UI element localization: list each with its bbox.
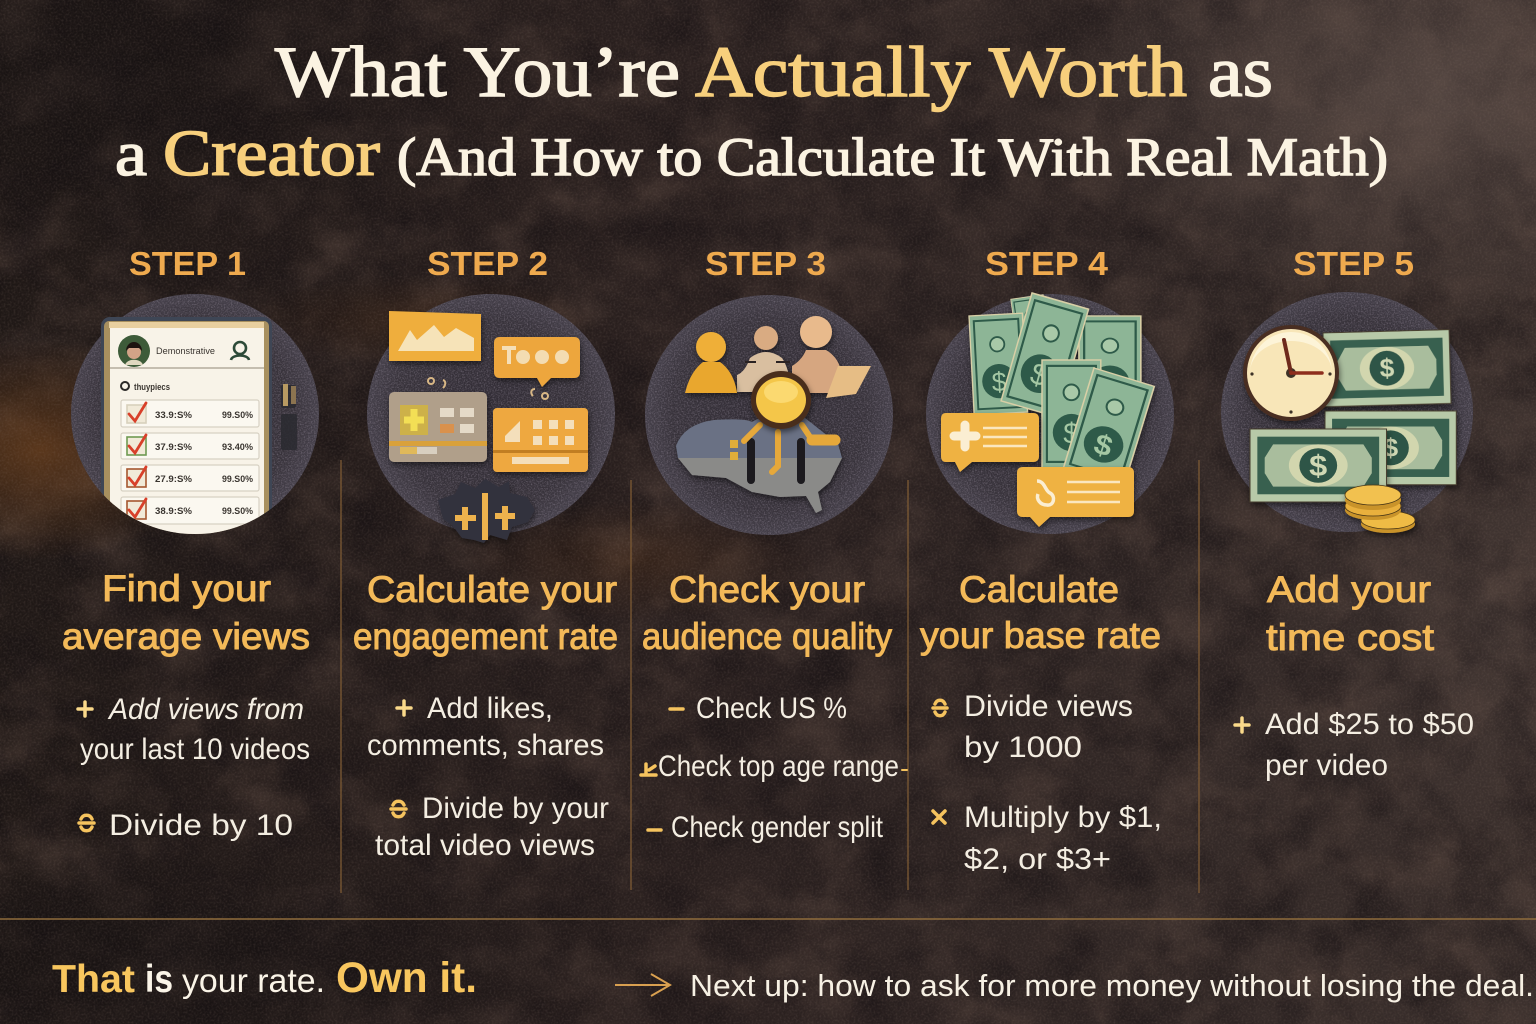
text: divide views (933, 690, 1133, 764)
title: as (1208, 32, 1273, 112)
icon: phone with checklist: 33.9:S% (155, 410, 192, 420)
heading: find your average views: Find your (102, 568, 271, 609)
text: multiply (933, 801, 1162, 876)
title (115, 32, 1388, 190)
footer: next up: Next up: how to ask for more money without losing the deal. (690, 968, 1534, 1003)
stats card (389, 392, 487, 462)
back bills: $ (991, 367, 1007, 397)
heading: add time cost: time cost (1266, 617, 1435, 658)
icon: phone with checklist: 27.9:S% (155, 474, 192, 484)
map (676, 413, 842, 513)
person left (685, 332, 737, 393)
step 4 label: STEP 4 (985, 245, 1109, 282)
heading: find your average views (62, 568, 310, 657)
heading: calculate base rate: your base rate (920, 615, 1161, 656)
bill top: $ (1379, 353, 1395, 383)
icon: phone with checklist: 99.S0% (222, 506, 253, 516)
text: add time cost per video: per video (1265, 749, 1388, 782)
back bills: $ (1090, 428, 1116, 463)
heading: add time cost (1266, 569, 1435, 658)
icon: phone with checklist: 93.40% (222, 442, 253, 452)
icon: phone with checklist: 99.S0% (222, 410, 253, 420)
text: check us: Check US % (696, 692, 847, 725)
icon: phone with checklist: 38.9:S% (155, 506, 192, 516)
title: Creator (163, 117, 380, 190)
text: add views (78, 693, 310, 766)
step 2 label: STEP 2 (427, 245, 548, 282)
title: What You’re (275, 32, 680, 112)
panel: step 1 (62, 245, 319, 842)
text: add views: Add views from (107, 693, 304, 726)
step 1 label: STEP 1 (129, 245, 246, 282)
text: divide by views: Divide by your (422, 792, 609, 825)
comment bubble (494, 337, 580, 387)
heading: add time cost: Add your (1267, 569, 1431, 610)
bubble left (941, 413, 1039, 472)
magnifier rays (744, 425, 835, 472)
coins (1345, 485, 1415, 533)
back bills: $ (1063, 417, 1080, 450)
footer: own it: your rate. (182, 962, 325, 999)
footer: own it: is (145, 958, 173, 1001)
person middle (737, 326, 791, 392)
panel: step 3 (641, 245, 907, 844)
bill top (1323, 330, 1451, 407)
text: add likes: comments, shares (367, 729, 604, 762)
icon: clock, cash and coins (1221, 292, 1473, 533)
text: check gender: Check gender split (671, 811, 884, 844)
small bubble (826, 366, 871, 398)
heading: calculate engagement (353, 569, 618, 657)
heading: find your average views: average views (62, 616, 310, 657)
title: (And How to Calculate It With Real Math) (397, 127, 1388, 187)
bubble right (1017, 467, 1134, 527)
back bills: $ (1027, 357, 1052, 394)
text: add time cost per video: Add $25 to $50 (1265, 708, 1474, 741)
heading: calculate base rate (920, 569, 1161, 656)
heading: calculate base rate: Calculate (959, 569, 1119, 610)
burst icon (438, 479, 535, 543)
text: multiply: $2, or $3+ (964, 843, 1111, 876)
panel: step 2 (353, 245, 618, 862)
bill front (1250, 429, 1386, 502)
map markers (730, 440, 801, 480)
bill front: $ (1309, 449, 1327, 483)
text: add likes (367, 692, 604, 762)
heading: check audience: audience quality (642, 616, 892, 657)
text: check age: Check top age range (658, 750, 899, 783)
icon: engagement cards (367, 294, 615, 543)
keypad card (493, 408, 588, 472)
heading: calculate engagement: Calculate your (367, 569, 617, 610)
icon: phone with checklist: thuypiecs (134, 382, 170, 392)
back bills (969, 293, 1154, 486)
text: divide by 10: Divide by 10 (109, 809, 293, 842)
panel: step 4 (920, 245, 1174, 876)
text: divide by views (375, 792, 609, 862)
title: a (115, 118, 147, 189)
text: divide by views: total video views (375, 829, 595, 862)
icon: phone with checklist: Demonstrative (156, 346, 215, 356)
bill middle (1325, 411, 1456, 485)
clock (1243, 325, 1339, 421)
text: add views: your last 10 videos (80, 733, 310, 766)
text: divide views: Divide views (964, 690, 1133, 723)
bill middle: $ (1383, 433, 1398, 462)
footer: own it: Own it. (336, 954, 477, 1002)
text: divide views: by 1000 (964, 731, 1082, 764)
footer divider (0, 918, 1536, 920)
icon: audience with magnifier and map (645, 295, 893, 535)
heading: calculate engagement: engagement rate (353, 616, 618, 657)
step 5 label: STEP 5 (1293, 245, 1414, 282)
person right (792, 316, 842, 393)
icon: phone with checklist: 37.9:S% (155, 442, 192, 452)
step 3 label: STEP 3 (705, 245, 826, 282)
footer: own it: That (52, 958, 135, 1001)
small quote marks (428, 378, 548, 399)
icon: phone with checklist: 99.S0% (222, 474, 253, 484)
heading: check audience: Check your (669, 569, 865, 610)
icon: cash and speech bubbles (926, 293, 1174, 534)
title: Actually Worth (695, 32, 1187, 112)
text: multiply: Multiply by $1, (964, 801, 1162, 834)
text: add time cost per video (1235, 708, 1474, 782)
icon: phone with checklist (71, 294, 319, 557)
arrow (615, 974, 670, 996)
column dividers (341, 460, 1199, 893)
heading: check audience (642, 569, 892, 657)
text: add likes: Add likes, (427, 692, 553, 725)
footer: own it (52, 954, 477, 1002)
panel: step 5 (1221, 245, 1474, 782)
photo card (389, 311, 481, 361)
magnifier (751, 371, 811, 429)
